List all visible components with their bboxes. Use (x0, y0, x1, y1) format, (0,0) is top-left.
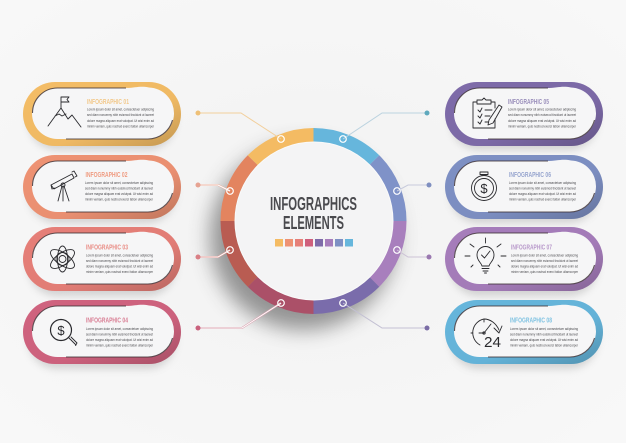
text block: infographic 07: Lorem ipsum dolor sit amet, consectetuer adipiscing (511, 254, 578, 258)
icon: telescope (51, 171, 77, 201)
text block: infographic 07: minim veniam, quis nostrud exerci tation ullamcorper (511, 270, 579, 274)
connector: infographic 07 (394, 247, 432, 260)
panel: infographic 08 (445, 300, 603, 369)
icon: atom (48, 246, 77, 272)
icon: magnifier with dollar (50, 320, 77, 346)
text block: infographic 01: dolore magna aliquam erat volutpat. Ut wisi enim ad (87, 119, 154, 123)
icon: mountain with flag (48, 97, 81, 127)
panel: infographic 03 (23, 227, 181, 296)
text block: infographic 01: minim veniam, quis nostrud exerci tation ullamcorper (87, 124, 155, 128)
heading: infographic 06: INFOGRAPHIC 06 (509, 172, 551, 179)
text block: infographic 07: dolore magna aliquam erat volutpat. Ut wisi enim ad (511, 264, 578, 268)
text block: infographic 01: sed diam nonummy nibh euismod tincidunt ut laoreet (87, 113, 155, 117)
panel: infographic 02 (23, 155, 181, 223)
heading: infographic 05: INFOGRAPHIC 05 (508, 99, 549, 106)
icon: magnifier with dollar: $ (57, 323, 65, 338)
legend: colour squares (275, 239, 353, 246)
panel: infographic 05 (445, 82, 603, 150)
text block: infographic 06 (509, 181, 577, 202)
text block: infographic 03: sed diam nonummy nibh euismod tincidunt ut laoreet (86, 259, 154, 263)
text block: infographic 05: sed diam nonummy nibh euismod tincidunt ut laoreet (508, 113, 577, 117)
heading: infographic 07: INFOGRAPHIC 07 (511, 244, 552, 252)
text block: infographic 02: dolore magna aliquam erat volutpat. Ut wisi enim ad (85, 192, 153, 196)
icon: light bulb with check (465, 238, 506, 273)
icon: stopwatch with dollar (472, 172, 496, 200)
text block: infographic 05 (508, 108, 577, 128)
heading: infographics elements: INFOGRAPHICS (270, 194, 357, 214)
icon: clipboard with pen (473, 98, 502, 128)
heading: infographics elements (270, 194, 357, 233)
text block: infographic 02: sed diam nonummy nibh euismod tincidunt ut laoreet (85, 186, 154, 190)
heading: infographic 08: INFOGRAPHIC 08 (510, 318, 552, 324)
heading: infographics elements: ELEMENTS (283, 213, 344, 233)
connector: infographic 02 (196, 182, 233, 194)
icon: 24-hour clock (471, 319, 502, 351)
text block: infographic 08: minim veniam, quis nostrud exerci tation ullamcorper (510, 344, 579, 348)
connector: infographic 03 (196, 247, 233, 260)
text block: infographic 05: Lorem ipsum dolor sit amet, consectetuer adipiscing (508, 108, 576, 112)
heading: infographic 03: INFOGRAPHIC 03 (86, 244, 128, 252)
text block: infographic 04: dolore magna aliquam erat volutpat. Ut wisi enim ad (86, 338, 153, 342)
text block: infographic 04: minim veniam, quis nostrud exerci tation ullamcorper (86, 344, 154, 348)
text block: infographic 03: minim veniam, quis nostrud exerci tation ullamcorper (86, 270, 154, 274)
text block: infographic 05: dolore magna aliquam erat volutpat. Ut wisi enim ad (508, 119, 576, 123)
text block: infographic 01 (87, 108, 155, 128)
text block: infographic 03: dolore magna aliquam erat volutpat. Ut wisi enim ad (86, 264, 153, 268)
central white disc (235, 142, 393, 300)
text block: infographic 02 (85, 181, 154, 202)
icon: stopwatch with dollar: $ (480, 181, 488, 196)
text block: infographic 01: Lorem ipsum dolor sit amet, consectetuer adipiscing (87, 108, 154, 112)
text block: infographic 08 (510, 327, 579, 348)
panel: infographic 04 (23, 300, 181, 369)
text block: infographic 04 (86, 327, 154, 348)
text block: infographic 08: Lorem ipsum dolor sit amet, consectetuer adipiscing (510, 327, 578, 331)
connector: infographic 04 (196, 300, 284, 330)
text block: infographic 06: Lorem ipsum dolor sit amet, consectetuer adipiscing (509, 181, 576, 185)
panel: infographic 06 (445, 155, 603, 223)
text block: infographic 07: sed diam nonummy nibh euismod tincidunt ut laoreet (511, 259, 579, 263)
text block: infographic 05: minim veniam, quis nostrud exerci tation ullamcorper (508, 124, 577, 128)
connector: infographic 05 (340, 110, 430, 142)
connector: infographic 01 (196, 110, 284, 142)
text block: infographic 03 (86, 254, 154, 274)
panel: infographic 07 (445, 227, 603, 296)
heading: infographic 04: INFOGRAPHIC 04 (86, 318, 128, 324)
heading: infographic 02: INFOGRAPHIC 02 (86, 172, 128, 179)
text block: infographic 06: minim veniam, quis nostrud exerci tation ullamcorper (509, 198, 577, 202)
connector: infographic 06 (394, 182, 432, 194)
text block: infographic 03: Lorem ipsum dolor sit amet, consectetuer adipiscing (86, 254, 153, 258)
text block: infographic 07 (511, 254, 579, 274)
text block: infographic 08: sed diam nonummy nibh euismod tincidunt ut laoreet (510, 332, 579, 336)
text block: infographic 08: dolore magna aliquam erat volutpat. Ut wisi enim ad (510, 338, 578, 342)
heading: infographic 01: INFOGRAPHIC 01 (87, 99, 129, 106)
text block: infographic 06: dolore magna aliquam erat volutpat. Ut wisi enim ad (509, 192, 576, 196)
text block: infographic 02: Lorem ipsum dolor sit amet, consectetuer adipiscing (85, 181, 153, 185)
text block: infographic 04: sed diam nonummy nibh euismod tincidunt ut laoreet (86, 332, 154, 336)
text block: infographic 06: sed diam nonummy nibh euismod tincidunt ut laoreet (509, 186, 577, 190)
text block: infographic 02: minim veniam, quis nostrud exerci tation ullamcorper (85, 198, 154, 202)
connector: infographic 08 (340, 300, 430, 330)
icon: 24-hour clock: 24 (484, 334, 501, 351)
shadow of central ring (210, 144, 396, 330)
chart: central segmented ring (228, 135, 400, 307)
text block: infographic 04: Lorem ipsum dolor sit amet, consectetuer adipiscing (86, 327, 153, 331)
panel: infographic 01 (23, 82, 181, 150)
